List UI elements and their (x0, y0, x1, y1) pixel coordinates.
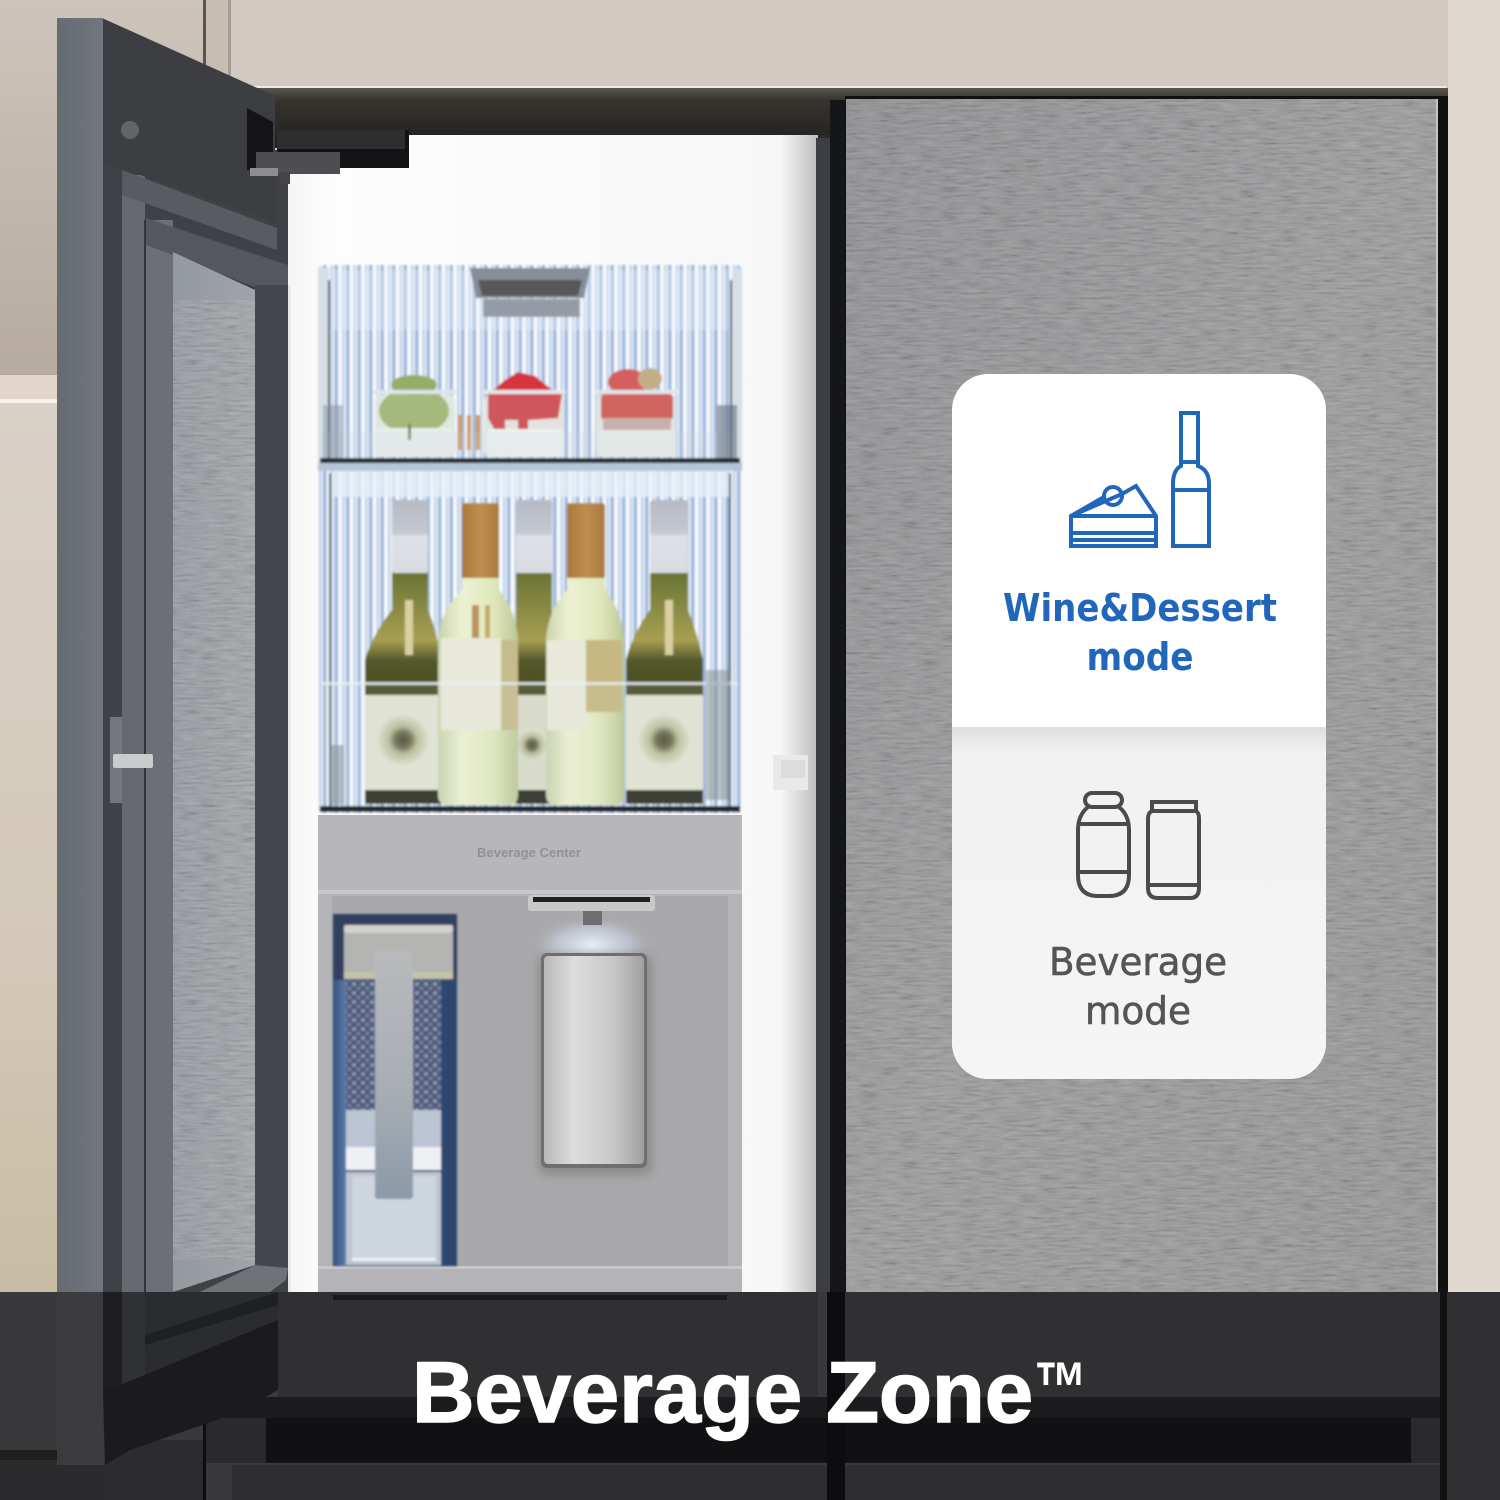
door latch (110, 717, 153, 803)
icon: wine bottle (1173, 413, 1209, 546)
icon: can (1148, 802, 1199, 898)
beverage center shelves (318, 265, 742, 813)
wine bottle: clear right (546, 503, 624, 805)
icon: cake (1071, 486, 1156, 546)
wine bottle: left (365, 500, 441, 804)
title: ™ (1034, 1348, 1087, 1428)
mode label: Beverage: mode (1085, 989, 1191, 1033)
right refrigerator door (815, 96, 1448, 1295)
refrigerator interior panel (278, 100, 845, 1292)
dessert bowl: green (373, 375, 457, 457)
wine bottle: rear centre (516, 500, 552, 804)
dispenser area (318, 894, 742, 1292)
lower bin front (320, 670, 740, 812)
bottom band (0, 1292, 1500, 1500)
mode label: Wine&Dessert: Wine&Dessert (1003, 586, 1277, 630)
beverage center label panel (318, 815, 742, 894)
tank handle (375, 951, 413, 1199)
open door: inner side (57, 18, 291, 1295)
mode label: Beverage: Beverage (1049, 940, 1227, 984)
dessert bowl: strawberry (482, 372, 566, 457)
between-bowl reflections (458, 415, 480, 450)
hinge (250, 130, 409, 184)
drip tray (538, 953, 652, 1175)
icon: jar (1078, 793, 1129, 896)
door screw (121, 121, 139, 139)
water dispenser nozzle (528, 895, 655, 975)
door outer edge (57, 18, 103, 1292)
dessert bowl: berry (594, 368, 678, 457)
wine bottle: right (626, 500, 703, 804)
wine bottle: clear left (438, 503, 518, 805)
title: Beverage Zone (412, 1345, 1033, 1441)
mode card (952, 374, 1326, 1079)
mode label: Beverage (1049, 940, 1227, 1033)
mode label: Wine&Dessert (1003, 586, 1277, 679)
beverage center label panel: Beverage Center (477, 845, 581, 860)
water tank (333, 914, 457, 1266)
air vent (470, 268, 590, 317)
door bottom, darkened (57, 1292, 103, 1465)
upper bin front (320, 405, 740, 463)
mode label: Wine&Dessert: mode (1086, 635, 1194, 679)
